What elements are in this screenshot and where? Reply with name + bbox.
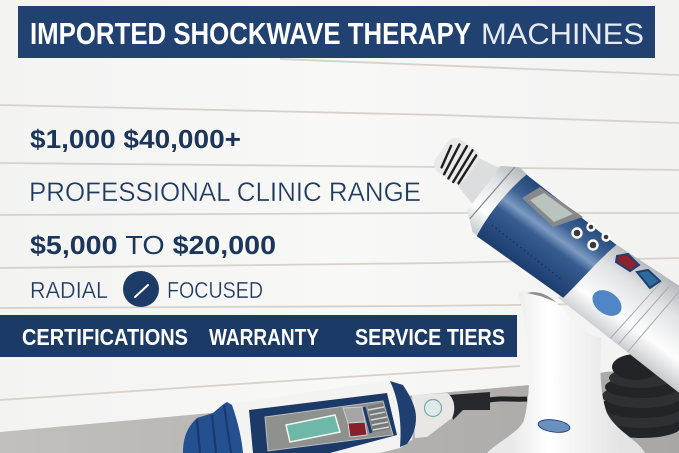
screen frame (522, 187, 583, 227)
price range text: $1,000 $40,000+ (30, 124, 241, 154)
round buttons (572, 224, 610, 250)
dotted seam (492, 225, 562, 280)
right buttons (368, 403, 390, 432)
radial label: RADIAL (30, 277, 108, 303)
threaded tip (430, 134, 483, 188)
blue grip (183, 402, 243, 453)
warranty: WARRANTY (209, 324, 319, 350)
silver ridges (610, 277, 678, 355)
right button lines (368, 407, 389, 430)
stand cup shadow (527, 292, 556, 302)
cable (485, 399, 527, 401)
grip ridges (197, 405, 231, 453)
main device (408, 124, 679, 396)
stand (487, 291, 645, 453)
stand logo (537, 418, 571, 434)
clinic range heading: PROFESSIONAL CLINIC RANGE (29, 177, 421, 207)
title text light: MACHINES (481, 18, 644, 51)
divider (364, 407, 371, 433)
grey panel (265, 401, 393, 451)
neck (453, 153, 503, 208)
table surface (0, 366, 679, 453)
blue body (475, 171, 619, 306)
blue button (637, 270, 660, 288)
icon: dial circle (123, 271, 159, 307)
focused label: FOCUSED (167, 277, 263, 303)
collar ridge (470, 164, 515, 222)
logo badge (588, 285, 626, 321)
silver front (555, 232, 679, 396)
handle badge (424, 400, 442, 416)
black rubber stack (601, 354, 679, 438)
bottom banner (0, 315, 517, 357)
strain relief (448, 392, 490, 420)
lcd (286, 415, 340, 442)
body (229, 380, 416, 453)
handheld unit (183, 380, 527, 453)
title text bold: IMPORTED SHOCKWAVE THERAPY (30, 16, 471, 51)
device barrel, rotated along axis (408, 124, 679, 396)
red button (348, 422, 367, 437)
menu panel (343, 407, 365, 423)
certifications: CERTIFICATIONS (22, 324, 188, 350)
handle (412, 393, 454, 438)
red button (616, 254, 639, 271)
blue face (249, 393, 397, 453)
clinic price: $5,000 TO $20,000 (30, 230, 276, 260)
service tiers: SERVICE TIERS (355, 324, 505, 350)
collar (458, 157, 530, 240)
title banner (18, 6, 655, 58)
blue collar (390, 381, 416, 447)
screen (530, 193, 573, 222)
